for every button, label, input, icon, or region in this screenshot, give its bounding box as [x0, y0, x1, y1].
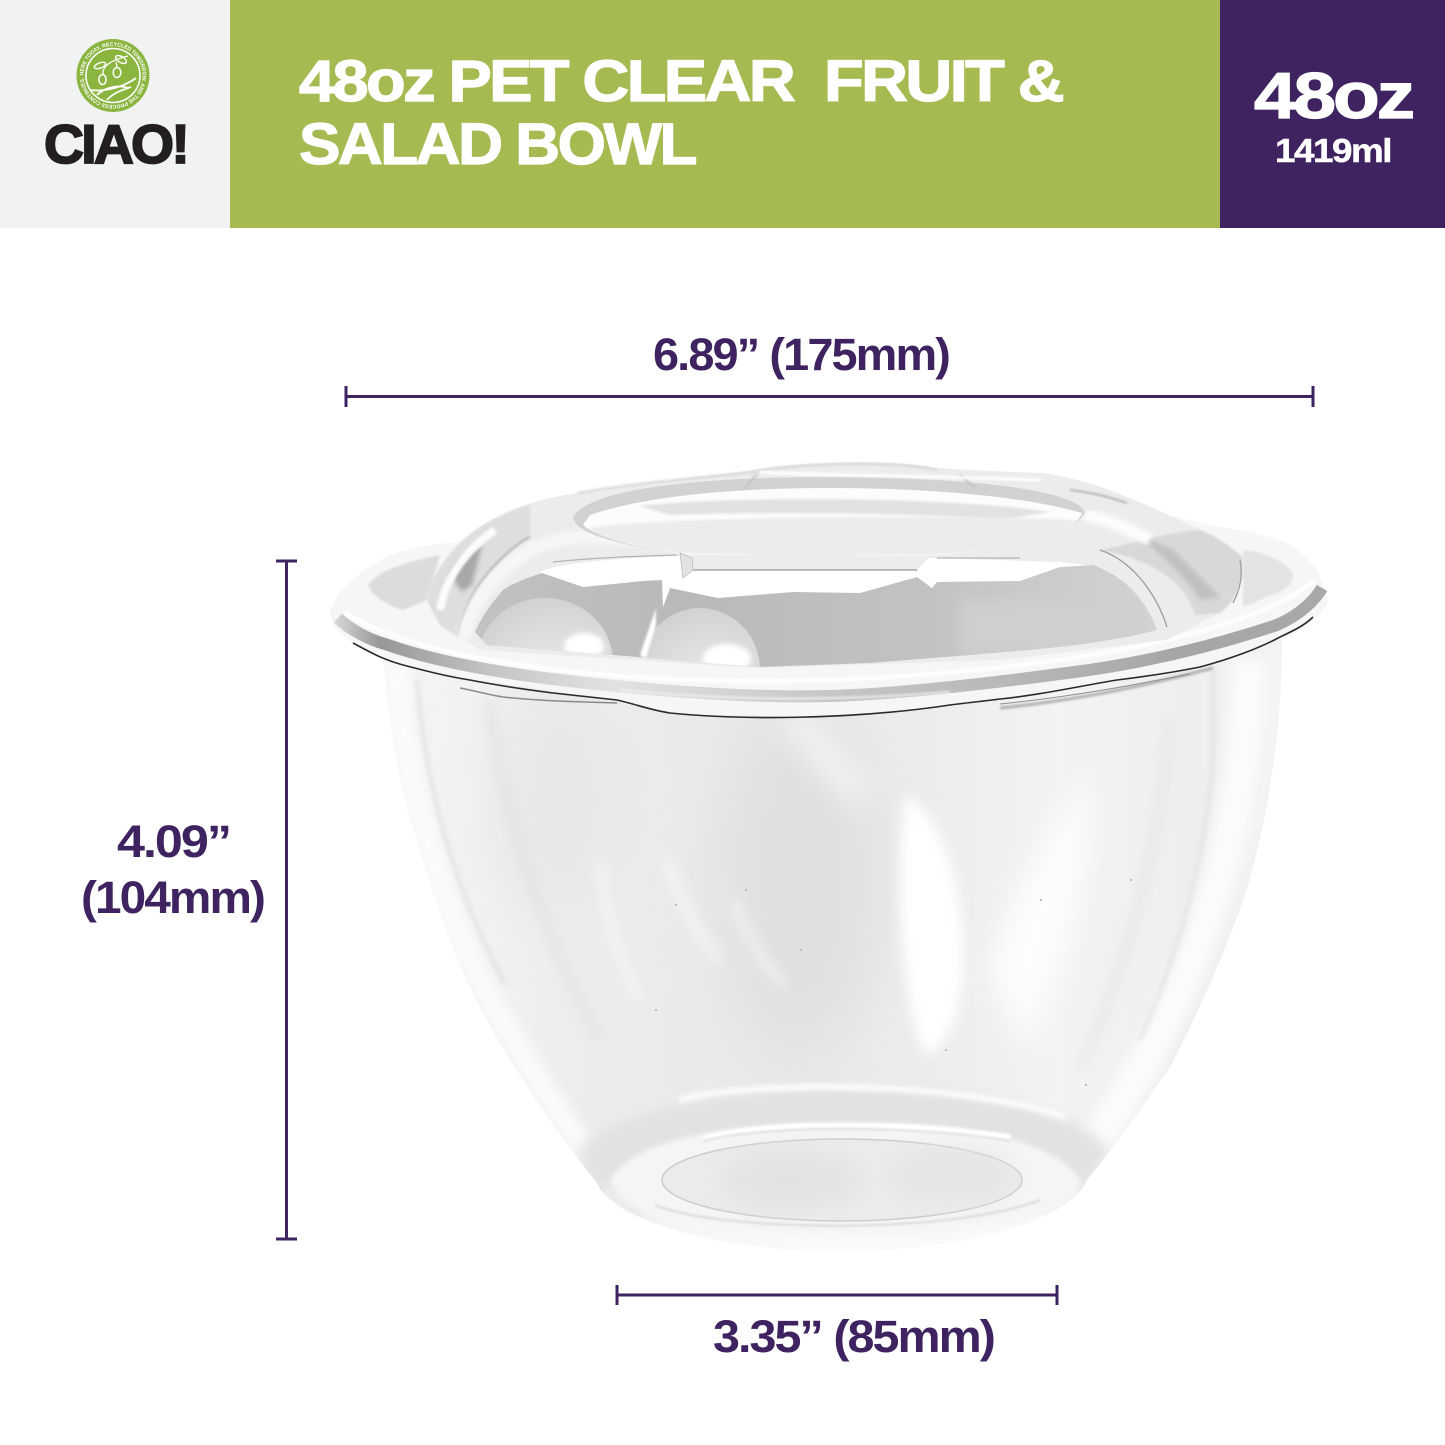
side highlight strips [424, 820, 586, 1154]
logo wordmark: CIAO! [44, 113, 187, 175]
lid top recess [573, 464, 1085, 557]
reflection: centre sphere [642, 608, 760, 667]
speckles [655, 879, 1132, 1086]
rim recess left [368, 555, 440, 610]
top width dimension [346, 329, 1313, 407]
header band [0, 0, 1445, 228]
title line 2: SALAD BOWL [299, 112, 696, 177]
white reflection band [540, 556, 1095, 610]
rim recess right [1243, 550, 1293, 607]
label: height millimetres: (104mm) [81, 872, 264, 923]
capacity in millilitres: 1419ml [1275, 132, 1391, 169]
lid right shoulder [1100, 530, 1242, 615]
capacity in ounces: 48oz [1254, 59, 1413, 132]
height dimension [81, 561, 297, 1239]
bowl rim [330, 517, 1328, 718]
lid left shoulder [427, 505, 530, 637]
lid shelf [553, 553, 1020, 578]
icon: circular recycling badge: HERE TODAY, RECYCLED TOMORROW. AND THE PROCESS CONTINUES. [80, 42, 146, 109]
bowl body [383, 640, 1282, 1251]
panel: title [230, 0, 1220, 228]
title line 1: 48oz PET CLEAR FRUIT & [299, 49, 1064, 114]
rim highlights [345, 580, 1316, 681]
arrow: height line [276, 561, 297, 1239]
label: top diameter: 6.89” (175mm) [653, 329, 949, 380]
central white streaks [900, 795, 963, 1055]
reflection: left sphere [482, 598, 612, 655]
base width dimension [617, 1285, 1057, 1362]
label: base diameter: 3.35” (85mm) [713, 1311, 994, 1362]
rim dark edge lines [353, 617, 1313, 718]
bowl base [578, 1087, 1110, 1249]
dome lid [427, 462, 1243, 668]
reflected grey interior [475, 565, 1157, 667]
arrow: base diameter line [617, 1285, 1057, 1305]
panel: logo area [0, 0, 230, 228]
arrow: top diameter line [346, 386, 1313, 407]
panel: capacity [1220, 0, 1445, 228]
product image: clear bowl with dome lid [330, 462, 1328, 1251]
label: height inches: 4.09” [117, 816, 230, 867]
white sliver between spheres [640, 608, 656, 658]
rim grey band [338, 588, 1322, 696]
